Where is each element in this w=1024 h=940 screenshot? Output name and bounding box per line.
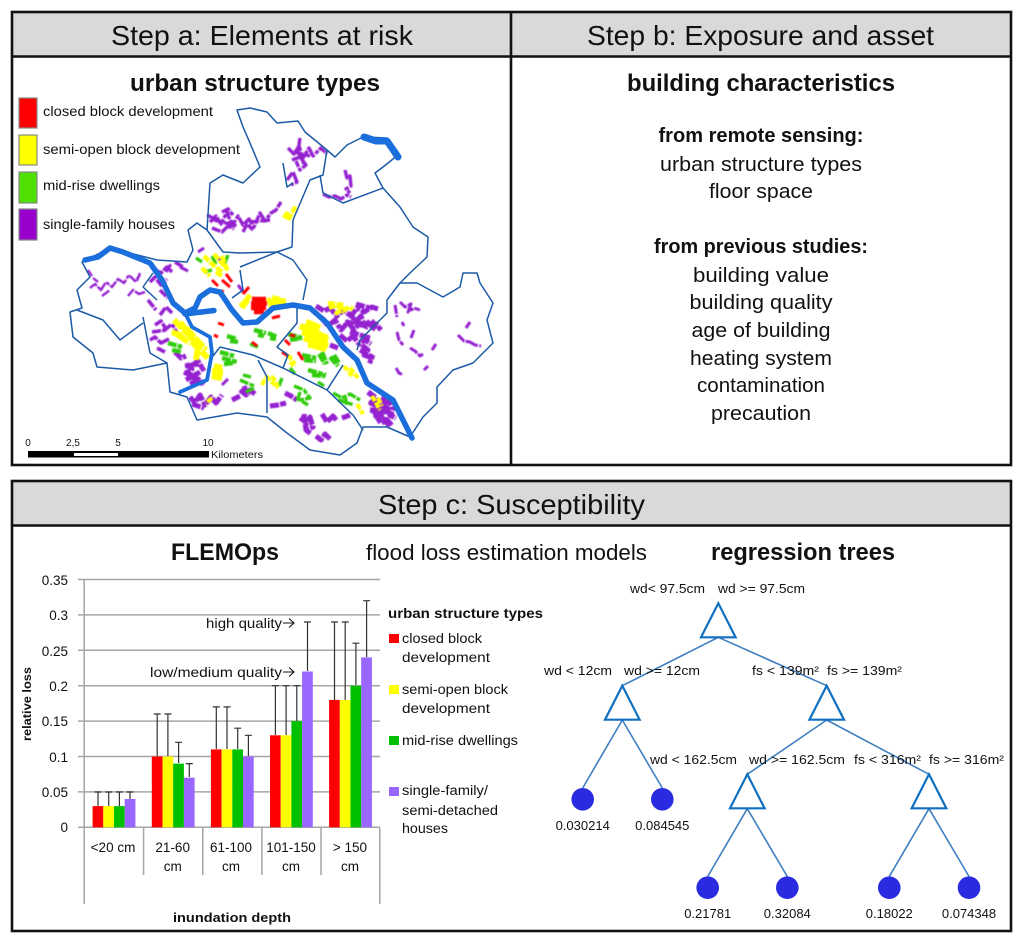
map legend: closed block development [43,103,213,119]
subheading: building characteristics: building characteristics [627,70,895,97]
heading: step a [12,12,511,56]
split labels: fs < 139m² [752,663,820,678]
leaf values: 0.030214 [556,818,610,833]
map legend [19,98,240,240]
quality annotations [150,615,294,680]
split labels: fs < 316m² [854,752,922,767]
bar chart: relative loss by inundation depth [20,573,543,925]
y axis labels: 0.15 [42,714,68,729]
y axis labels: 0.2 [49,679,68,694]
text block: from previous studies: from previous studies: [654,235,868,258]
leaf values [556,818,996,921]
split labels: wd < 12cm [543,663,612,678]
leaf values: 0.074348 [942,906,996,921]
split labels: wd >= 97.5cm [717,581,805,596]
land use: single-family houses [88,138,481,440]
split labels: wd >= 12cm [623,663,700,678]
error bars [94,601,370,806]
heading: step b [511,12,1011,56]
leaf nodes [571,788,980,899]
subheading: regression trees: regression trees [711,539,895,566]
y axis labels: 0.25 [42,644,68,659]
panel: step a elements at risk [12,12,511,461]
text block: from previous studies: building value [693,264,829,287]
chart legend [388,606,543,836]
panel: step c susceptibility [12,481,1011,925]
river elbe [85,137,412,438]
chart legend: urban structure types [388,606,543,621]
x axis title: inundation depth [173,911,291,925]
text block: from remote sensing [658,124,864,203]
map legend: semi-open block development [43,141,240,157]
quality annotations: low/medium quality [150,664,282,680]
chart legend: houses [402,821,448,836]
heading: step c [12,481,1011,525]
subheading: flemops: FLEMOps [171,539,279,566]
split labels: fs >= 139m² [827,663,903,678]
chart legend: development [402,701,490,716]
x axis labels: 61-100 [210,840,252,855]
text block: from remote sensing: urban structure types [660,153,862,176]
text block: from previous studies: heating system [690,347,832,370]
scale bar: 5 [115,438,121,449]
y axis labels: 0 [60,820,68,835]
scale bar [25,438,263,461]
split labels [543,581,1005,767]
x axis labels: cm [222,859,240,874]
map legend: single-family houses [43,216,175,232]
x axis labels: cm [164,859,182,874]
scale bar: 0 [25,438,31,449]
y axis title: relative loss [20,667,34,741]
map legend: mid-rise dwellings [43,177,160,193]
leaf values: 0.21781 [684,906,731,921]
x axis labels: 21-60 [155,840,190,855]
heading: step a: Step a: Elements at risk [111,20,414,51]
leaf values: 0.084545 [635,818,689,833]
text block: from previous studies [654,235,868,425]
heading: step b: Step b: Exposure and asset [587,20,934,51]
text block: from previous studies: contamination [697,374,825,397]
city boundary and districts [70,108,493,455]
chart legend: development [402,650,490,665]
x axis labels: cm [282,859,300,874]
chart legend: semi-detached [402,803,498,818]
x axis labels [91,840,367,874]
quality annotations: high quality [206,615,282,631]
text block: from previous studies: building quality [690,291,833,314]
chart legend: closed block [402,631,482,646]
scale bar: 10 [202,438,214,449]
split labels: wd< 97.5cm [629,581,705,596]
heading: step c: Step c: Susceptibility [378,489,645,520]
split labels: wd < 162.5cm [649,752,737,767]
tree branches [583,637,969,876]
split labels: fs >= 316m² [929,752,1005,767]
y axis labels [42,573,68,835]
land use: mid-rise dwellings [168,255,360,406]
leaf values: 0.32084 [764,906,811,921]
split labels: wd >= 162.5cm [748,752,845,767]
leaf values: 0.18022 [866,906,913,921]
x axis labels: > 150 [333,840,367,855]
y axis labels: 0.35 [42,573,68,588]
decision nodes [605,603,946,808]
land use: semi-open block development [172,206,382,414]
panel: step b exposure and asset [511,12,1011,425]
scale bar: Kilometers [211,450,263,461]
x axis labels: <20 cm [91,840,135,855]
x axis labels: cm [341,859,359,874]
map of urban structure types [70,108,493,455]
text block: from remote sensing: floor space [709,180,813,203]
y axis labels: 0.1 [49,750,68,765]
x axis labels: 101-150 [266,840,316,855]
regression tree diagram [543,581,1005,921]
scale bar: 2,5 [66,438,80,449]
chart legend: mid-rise dwellings [402,733,518,748]
y axis labels: 0.05 [42,785,68,800]
text block: from previous studies: age of building [692,319,830,342]
bars [93,657,372,827]
chart legend: single-family/ [402,783,488,798]
subheading: flood loss estimation models: flood loss estimation models [366,540,647,565]
subheading: urban structure types: urban structure types [130,70,380,97]
y axis labels: 0.3 [49,608,68,623]
text block: from remote sensing: from remote sensing: [658,124,864,147]
land use: closed block development [212,274,303,360]
text block: from previous studies: precaution [711,402,811,425]
chart legend: semi-open block [402,682,508,697]
